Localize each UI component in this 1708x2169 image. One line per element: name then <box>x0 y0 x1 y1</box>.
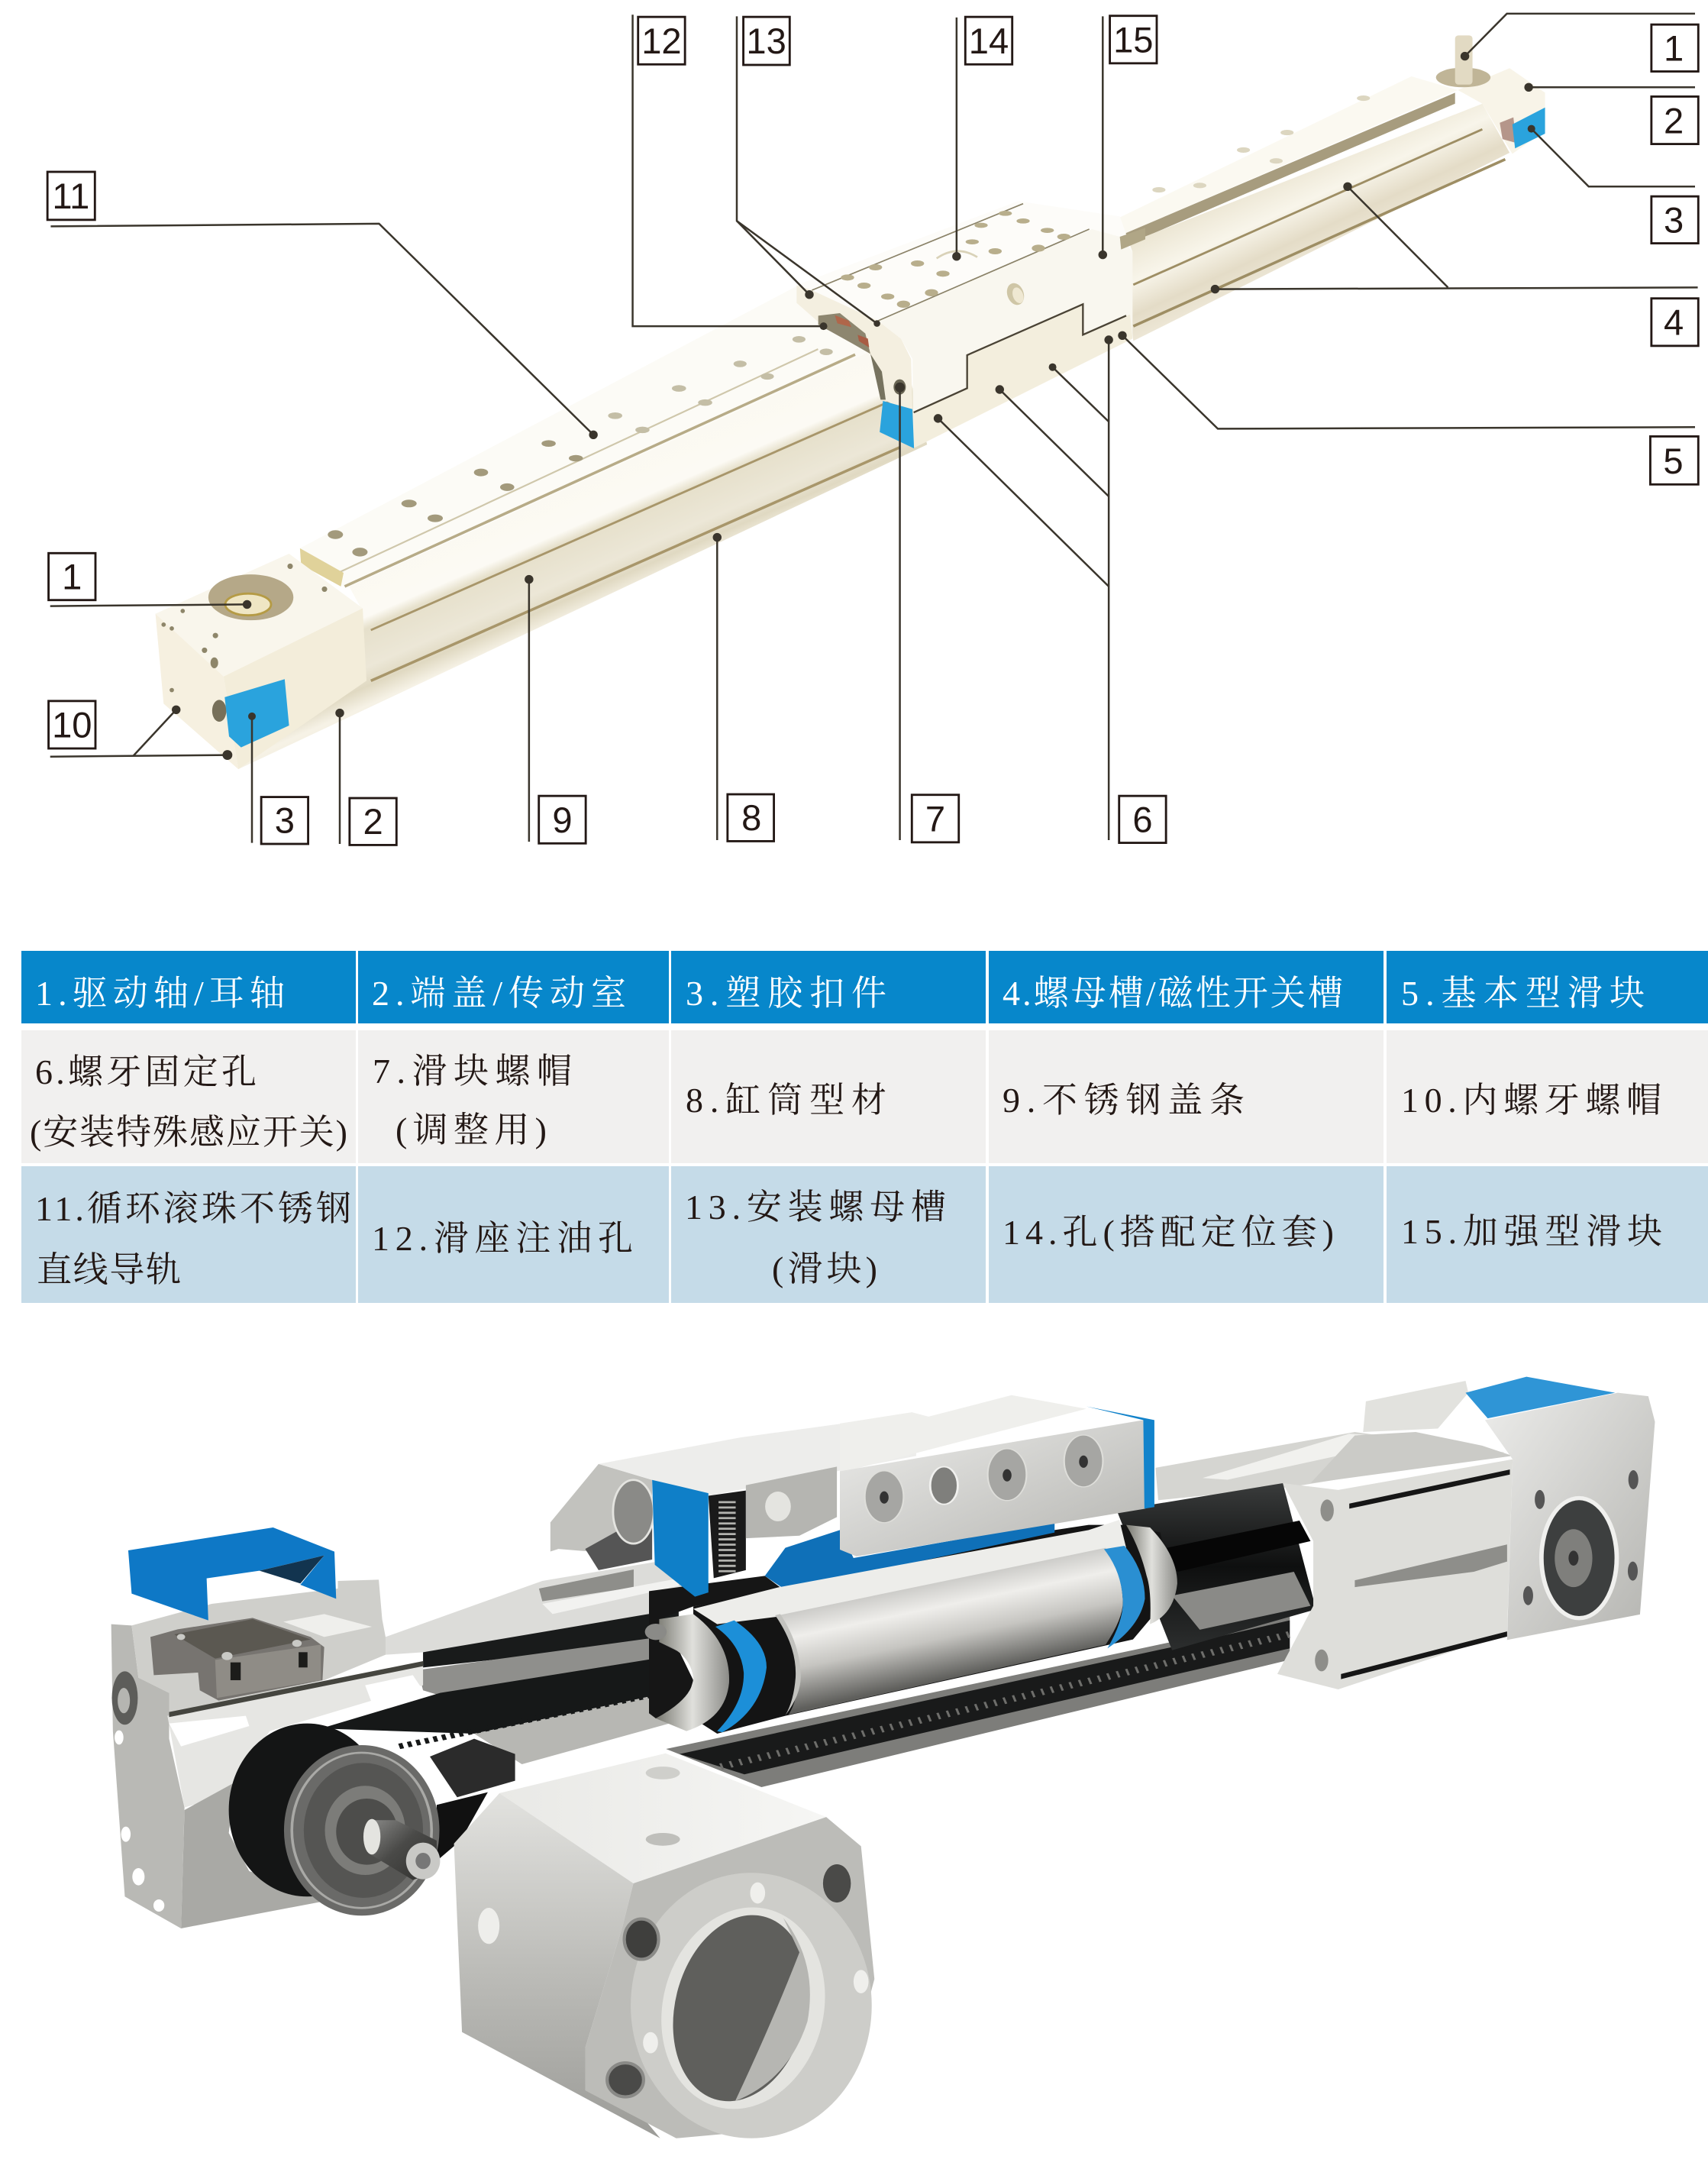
number boxes <box>47 16 1698 845</box>
leader dots <box>172 52 1535 760</box>
number labels: 2 <box>1664 100 1684 141</box>
drive shaft pin, right end <box>1436 35 1490 87</box>
header labels: 3.塑胶扣件 <box>686 974 886 1013</box>
row three labels: 13.安装螺母槽 <box>685 1188 946 1227</box>
number labels: 4 <box>1664 302 1684 343</box>
photo: cutaway of actuator <box>111 1377 1655 2138</box>
row three labels: 11.循环滚珠不锈钢 <box>35 1189 351 1228</box>
number labels: 12 <box>641 21 682 61</box>
row three labels <box>35 1188 1662 1289</box>
mounting holes <box>161 95 1370 722</box>
right housing and internals <box>1117 1377 1655 1689</box>
row two labels: (安装特殊感应开关) <box>30 1113 347 1152</box>
row three labels: 直线导轨 <box>37 1250 181 1289</box>
belt around pulley <box>229 1724 386 1896</box>
lower belt channel <box>666 1615 1290 1787</box>
number labels: 13 <box>746 21 786 61</box>
left housing, belt and pulley <box>111 1527 699 1928</box>
clamp block <box>150 1618 324 1701</box>
slider block and blue end cap <box>550 1414 916 1597</box>
number labels: 10 <box>52 705 92 745</box>
header labels: 1.驱动轴/耳轴 <box>35 974 285 1013</box>
number labels: 7 <box>925 799 945 839</box>
number labels: 3 <box>275 800 295 841</box>
number labels: 9 <box>552 800 573 840</box>
photo: rodless actuator with numbered callouts <box>47 14 1698 845</box>
drive shaft disc, left end <box>208 574 293 620</box>
row three labels: 12.滑座注油孔 <box>372 1219 633 1258</box>
number labels: 5 <box>1663 441 1684 481</box>
header row <box>21 951 1708 1023</box>
number labels: 3 <box>1664 199 1684 240</box>
number labels: 11 <box>52 176 89 216</box>
slider side with counterbored holes <box>840 1395 1154 1556</box>
number labels: 14 <box>969 21 1009 61</box>
row two labels <box>30 1052 1661 1152</box>
leader lines <box>50 14 1698 844</box>
row two labels: 10.内螺牙螺帽 <box>1401 1081 1661 1120</box>
row two labels: 6.螺牙固定孔 <box>35 1052 257 1091</box>
blue plastic clips <box>224 108 1545 748</box>
number labels: 15 <box>1113 20 1153 60</box>
header labels: 2.端盖/传动室 <box>372 974 626 1013</box>
cavity behind cylinder <box>649 1576 786 1718</box>
row two labels: 9.不锈钢盖条 <box>1003 1081 1245 1120</box>
number labels: 1 <box>1664 27 1684 68</box>
row two labels: (调整用) <box>396 1110 547 1149</box>
row three labels: 14.孔(搭配定位套) <box>1003 1213 1334 1252</box>
row two cells <box>21 1030 1708 1163</box>
actuator body <box>156 68 1545 769</box>
front end cap block <box>454 1754 874 2138</box>
header labels: 4.螺母槽/磁性开关槽 <box>1003 974 1343 1013</box>
header labels <box>35 974 1645 1013</box>
row two labels: 8.缸筒型材 <box>686 1081 886 1120</box>
row three cells <box>21 1166 1708 1303</box>
number labels: 6 <box>1132 799 1153 839</box>
piston cylinder and seals <box>645 1520 1177 1734</box>
number labels: 1 <box>62 556 82 596</box>
blue clip, loose <box>128 1527 336 1621</box>
number labels: 2 <box>363 801 383 842</box>
row three labels: (滑块) <box>772 1249 877 1288</box>
row two labels: 7.滑块螺帽 <box>373 1052 572 1091</box>
slider carriage <box>796 201 1145 448</box>
number labels: 8 <box>741 797 761 838</box>
number labels <box>52 20 1684 842</box>
header labels: 5.基本型滑块 <box>1401 974 1645 1013</box>
pulley <box>284 1745 440 1915</box>
table of part names <box>21 951 1708 1303</box>
row three labels: 15.加强型滑块 <box>1401 1212 1662 1251</box>
